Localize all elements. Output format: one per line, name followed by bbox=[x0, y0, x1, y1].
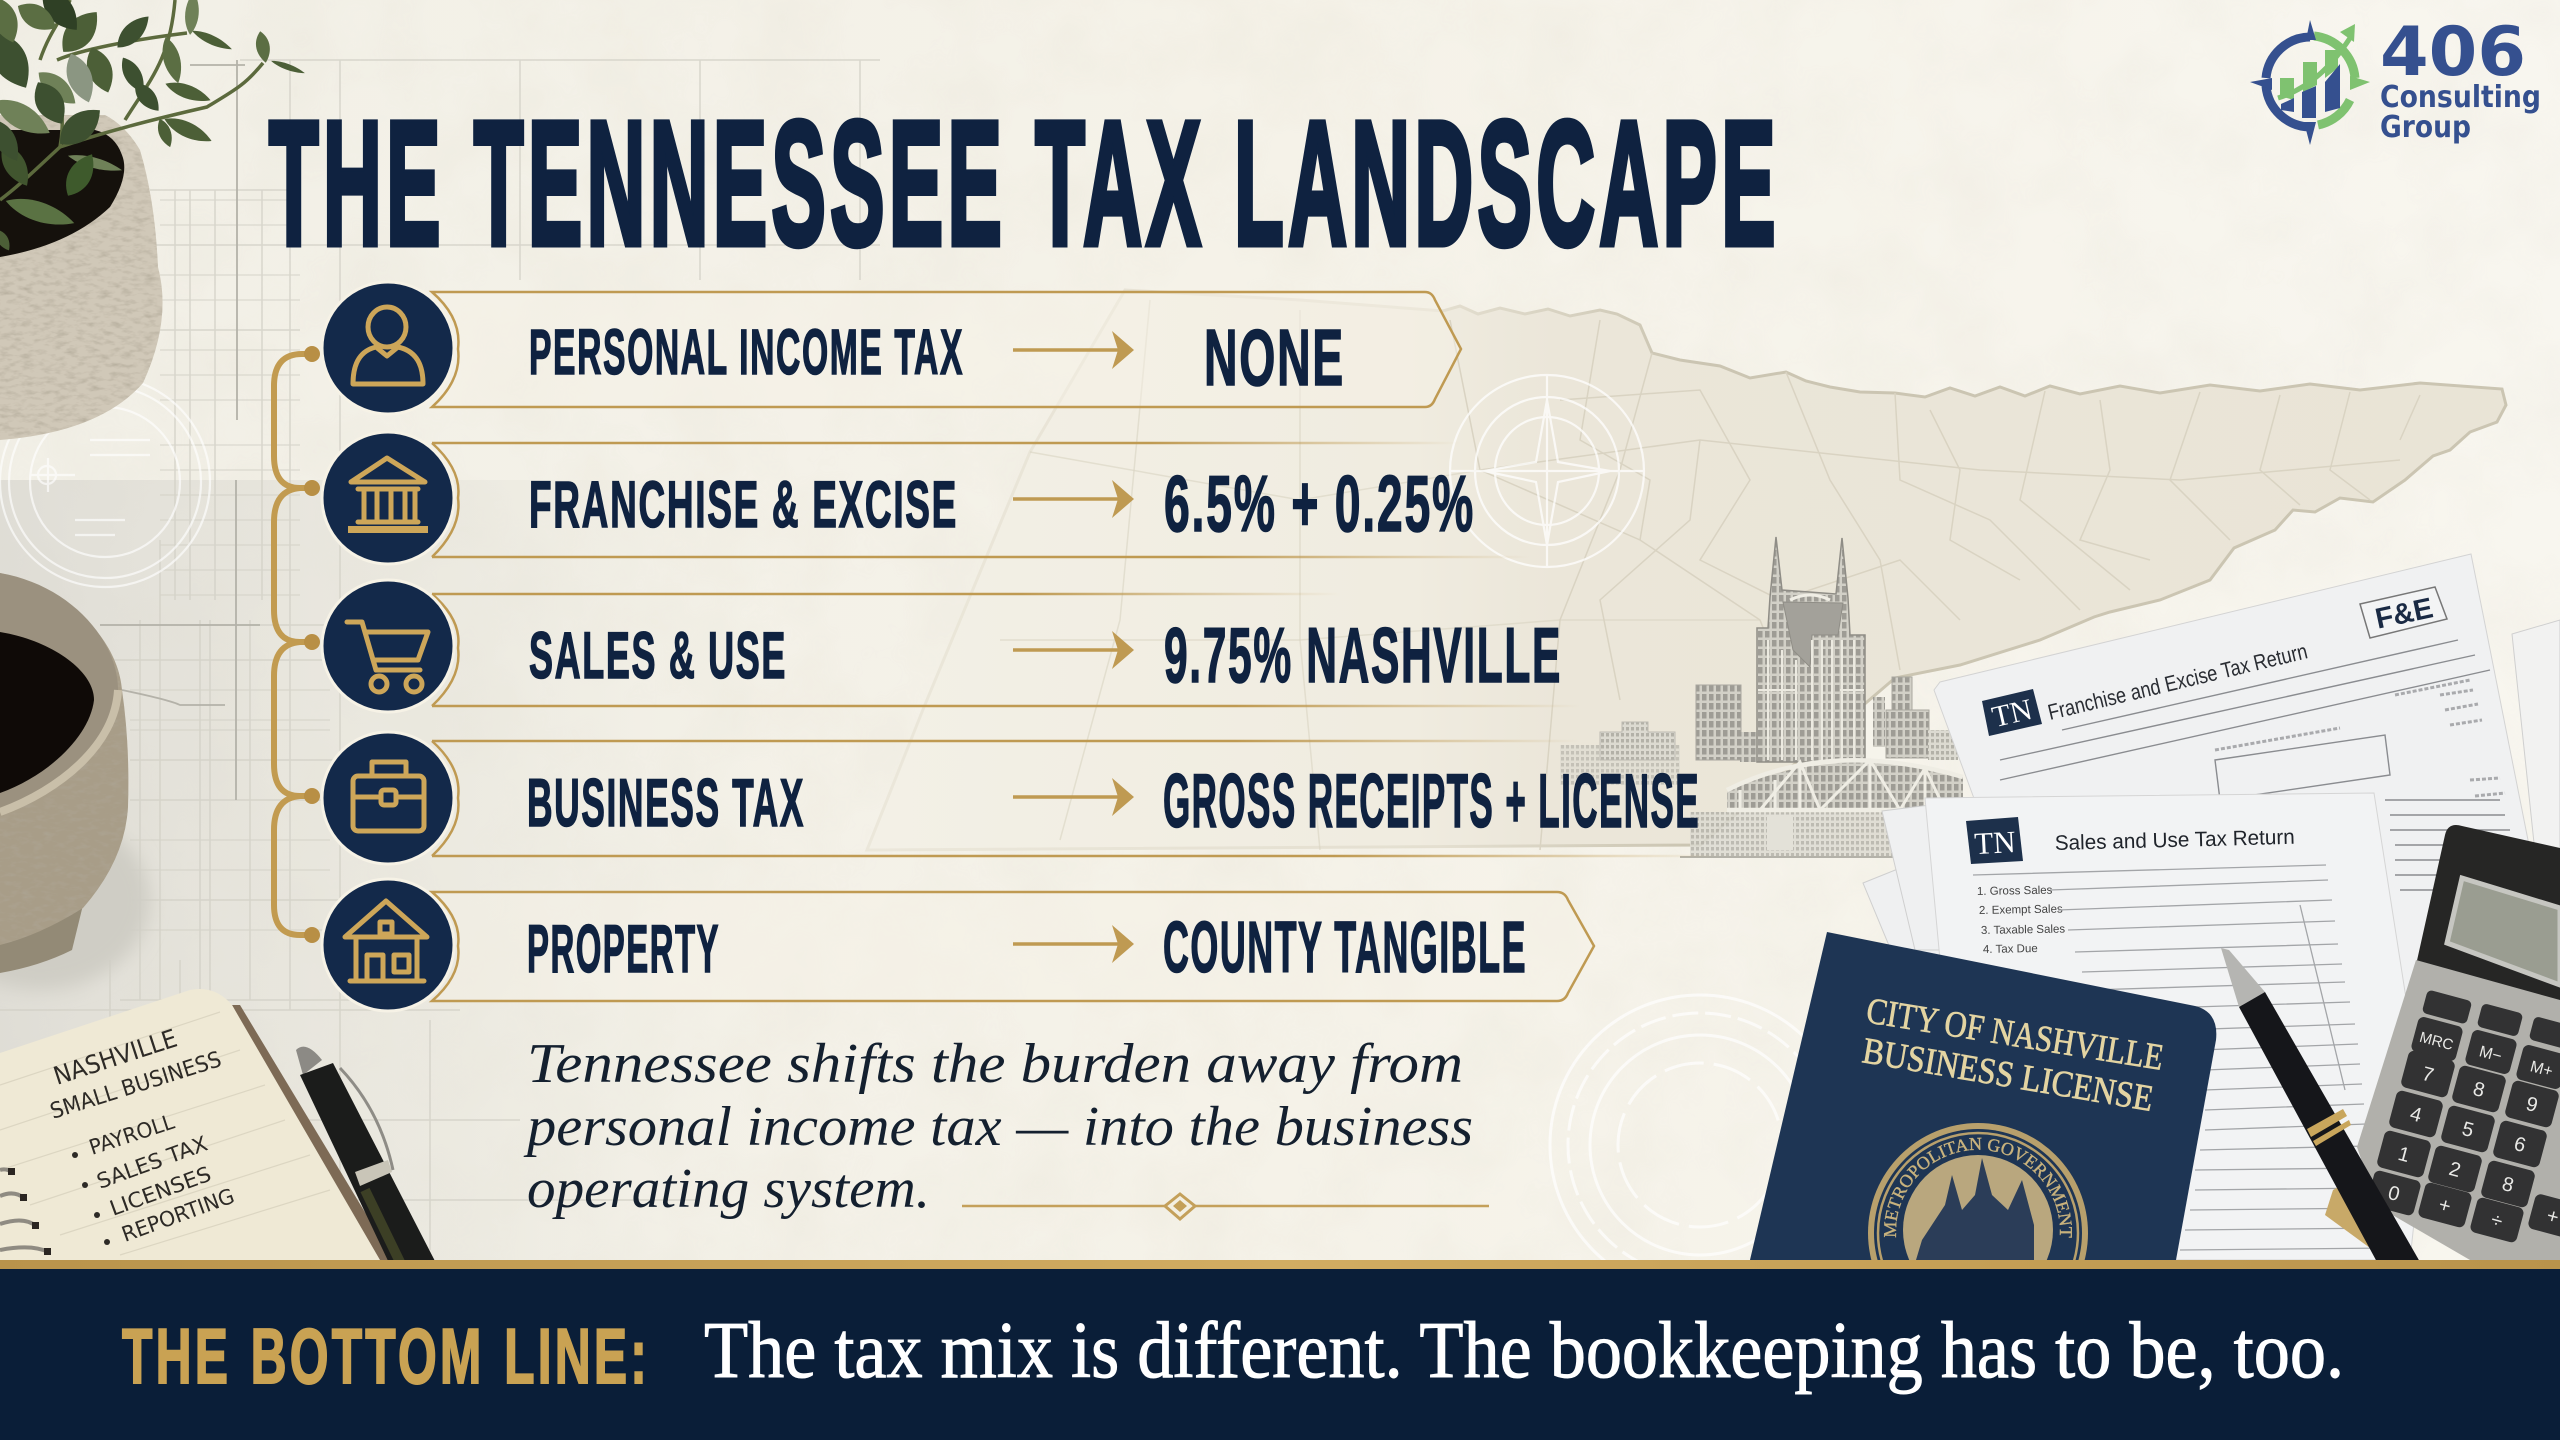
calculator keys: MRC bbox=[2418, 1029, 2455, 1054]
pen beside notebook bbox=[296, 1047, 437, 1265]
Nashville skyline and bridge bbox=[1560, 537, 1990, 858]
ribbon bbox=[432, 443, 1530, 557]
TN badge: TN bbox=[1989, 693, 2035, 734]
banner message: The tax mix is different. The bookkeeping has to be, too. bbox=[704, 1307, 2344, 1395]
ribbon bbox=[432, 741, 1720, 856]
form rows: 4. Tax Due bbox=[1983, 943, 2038, 956]
label: FRANCHISE & EXCISE bbox=[529, 467, 958, 541]
form rows bbox=[1977, 885, 2065, 956]
row: sales and use bbox=[322, 580, 1580, 712]
logo mark bbox=[2250, 20, 2370, 145]
calculator keys bbox=[2366, 989, 2560, 1244]
Tennessee map bbox=[867, 290, 2506, 850]
value: 6.5% + 0.25% bbox=[1164, 459, 1475, 548]
italic takeaway statement: operating system. bbox=[527, 1158, 930, 1220]
licence seal: METROPOLITAN GOVERNMENT bbox=[1884, 1138, 2072, 1238]
connector bracket bbox=[274, 346, 320, 943]
text: GROSS RECEIPTS + LICENSE bbox=[1163, 759, 1700, 844]
bottom line banner bbox=[0, 1260, 2560, 1440]
compass watermark lower right bbox=[1548, 994, 1803, 1260]
calculator keys: 9 bbox=[2524, 1093, 2540, 1117]
compass watermark left bbox=[0, 377, 210, 587]
row: property bbox=[322, 879, 1594, 1011]
pot bbox=[0, 115, 163, 440]
ribbon bbox=[432, 892, 1594, 1001]
coffee cup bbox=[0, 573, 150, 990]
calculator keys: 1 bbox=[2396, 1143, 2412, 1167]
ribbon bbox=[432, 594, 1580, 706]
label: BUSINESS TAX bbox=[527, 765, 805, 841]
banner label: THE BOTTOM LINE: bbox=[122, 1312, 650, 1400]
icon: cart bbox=[322, 580, 454, 712]
coaster under calculator bbox=[2325, 1180, 2400, 1248]
drafting grid background bbox=[0, 60, 880, 1250]
paper stack behind the returns bbox=[1863, 620, 2560, 960]
calculator keys: 4 bbox=[2408, 1103, 2424, 1127]
calculator keys: + bbox=[2436, 1194, 2453, 1218]
row: property: PROPERTY bbox=[527, 911, 720, 987]
licence title: CITY OF NASHVILLE bbox=[1864, 990, 2166, 1079]
calculator screen bbox=[2447, 878, 2560, 985]
icon: briefcase bbox=[322, 732, 454, 864]
value: NONE bbox=[1204, 313, 1345, 402]
calculator keys: ÷ bbox=[2489, 1209, 2505, 1233]
spiral binding bbox=[0, 1168, 51, 1255]
notebook bbox=[0, 989, 395, 1262]
calculator bbox=[2357, 825, 2560, 1260]
italic takeaway statement bbox=[523, 1033, 1473, 1220]
soil bbox=[0, 130, 124, 257]
F&amp;E box bbox=[2360, 587, 2447, 638]
calculator keys: 7 bbox=[2420, 1063, 2436, 1087]
potted plant bbox=[0, 0, 306, 440]
handwritten notes: REPORTING bbox=[119, 1184, 238, 1247]
TN badge bbox=[1982, 689, 2042, 736]
calculator keys: 8 bbox=[2471, 1078, 2487, 1102]
calculator keys: 8 bbox=[2500, 1173, 2516, 1197]
form title: Sales and Use Tax Return bbox=[2055, 826, 2295, 855]
form rows: 2. Exempt Sales bbox=[1979, 904, 2063, 917]
logo wordmark bbox=[2380, 13, 2541, 145]
arrow bbox=[1013, 331, 1134, 369]
handwritten notes: SMALL BUSINESS bbox=[47, 1047, 225, 1125]
TN badge: TN bbox=[1973, 824, 2017, 861]
calculator keys: 6 bbox=[2512, 1133, 2528, 1157]
map roads bbox=[1000, 300, 2420, 850]
licence seal bbox=[1868, 1123, 2088, 1260]
calculator keys: M− bbox=[2477, 1043, 2504, 1066]
handwritten notes: NASHVILLE bbox=[50, 1024, 181, 1091]
form rows: 3. Taxable Sales bbox=[1981, 924, 2065, 937]
handwritten notes: LICENSES bbox=[107, 1162, 214, 1221]
TN badge bbox=[1966, 817, 2023, 864]
handwritten notes bbox=[47, 1024, 238, 1247]
handwritten notes: PAYROLL bbox=[86, 1110, 178, 1160]
value: 9.75% NASHVILLE bbox=[1164, 611, 1562, 699]
handwritten notes: SALES TAX bbox=[94, 1131, 211, 1194]
calculator keys: M+ bbox=[2528, 1058, 2555, 1081]
form title: Franchise and Excise Tax Return bbox=[2045, 638, 2310, 725]
arrow bbox=[1013, 631, 1134, 669]
business licence booklet bbox=[1750, 932, 2216, 1260]
row: property: COUNTY TANGIBLE bbox=[1163, 908, 1527, 988]
arrow bbox=[1013, 925, 1134, 963]
logo wordmark: Group bbox=[2380, 110, 2471, 145]
icon: person bbox=[322, 282, 454, 414]
logo wordmark: Consulting bbox=[2380, 80, 2541, 115]
Batman building bbox=[1757, 537, 1865, 762]
label: SALES & USE bbox=[529, 618, 787, 692]
calculator keys: 0 bbox=[2386, 1182, 2402, 1206]
logo wordmark: 406 bbox=[2380, 13, 2526, 92]
icon: bank bbox=[322, 432, 454, 564]
pen on forms bbox=[2221, 948, 2420, 1262]
row: franchise and excise bbox=[322, 432, 1530, 564]
row: business tax bbox=[322, 732, 1720, 864]
label: PERSONAL INCOME TAX bbox=[529, 316, 964, 388]
icon: house bbox=[322, 879, 454, 1011]
italic takeaway statement: Tennessee shifts the burden away from bbox=[527, 1033, 1463, 1095]
logo: 406 Consulting Group bbox=[2250, 13, 2541, 145]
form: Sales and Use Tax Return bbox=[1830, 793, 2425, 1260]
calculator keys: 5 bbox=[2460, 1118, 2476, 1142]
form rows: 1. Gross Sales bbox=[1977, 885, 2053, 898]
compass watermark centre bbox=[1450, 375, 1645, 567]
row: personal income tax bbox=[322, 282, 1461, 414]
licence title bbox=[1859, 990, 2166, 1120]
arrow bbox=[1013, 480, 1134, 518]
leaves and stems bbox=[0, 0, 306, 253]
form: Franchise and Excise Tax Return bbox=[1934, 554, 2530, 1000]
arrow bbox=[1013, 778, 1134, 816]
italic takeaway statement: personal income tax — into the business bbox=[523, 1096, 1473, 1158]
licence title: BUSINESS LICENSE bbox=[1859, 1030, 2156, 1120]
bridge bbox=[1680, 760, 1990, 858]
calculator keys: 2 bbox=[2447, 1158, 2463, 1182]
F&amp;E box: F&E bbox=[2373, 592, 2436, 636]
diamond divider bbox=[962, 1194, 1489, 1219]
ribbon bbox=[432, 292, 1461, 407]
